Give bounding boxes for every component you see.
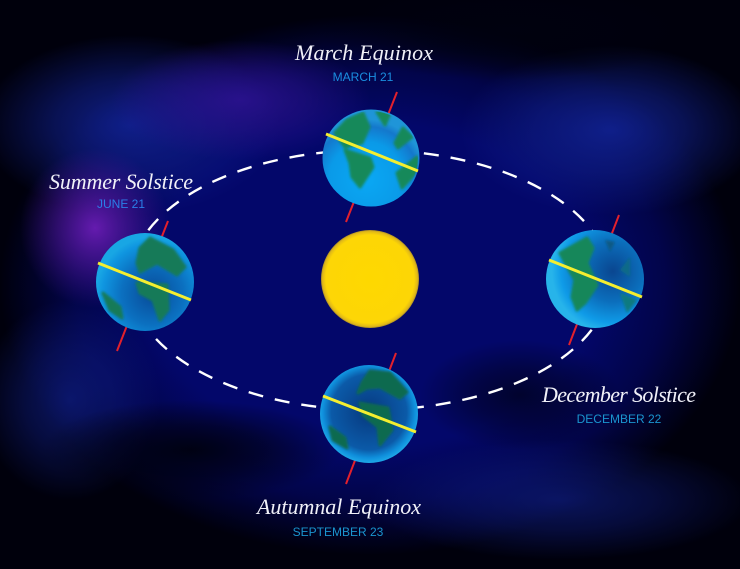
label: summer solstice	[49, 169, 193, 211]
earth: summer solstice	[96, 221, 194, 351]
earth: December solstice	[546, 215, 644, 345]
label: summer solstice: JUNE 21	[97, 197, 145, 211]
label: December solstice	[541, 382, 696, 426]
label: December solstice: December Solstice	[541, 382, 696, 407]
label: December solstice: DECEMBER 22	[577, 412, 662, 426]
label: autumnal equinox: SEPTEMBER 23	[293, 525, 384, 539]
label: summer solstice: Summer Solstice	[49, 169, 193, 194]
label: autumnal equinox	[255, 494, 421, 539]
label: March equinox: March Equinox	[294, 40, 433, 65]
label: autumnal equinox: Autumnal Equinox	[255, 494, 421, 519]
earth: March equinox	[322, 92, 420, 222]
label: March equinox: MARCH 21	[333, 70, 394, 84]
earth: autumnal equinox	[320, 353, 418, 484]
label: March equinox	[294, 40, 433, 84]
orbit: dashed ellipse	[130, 150, 610, 410]
sun	[321, 230, 419, 328]
